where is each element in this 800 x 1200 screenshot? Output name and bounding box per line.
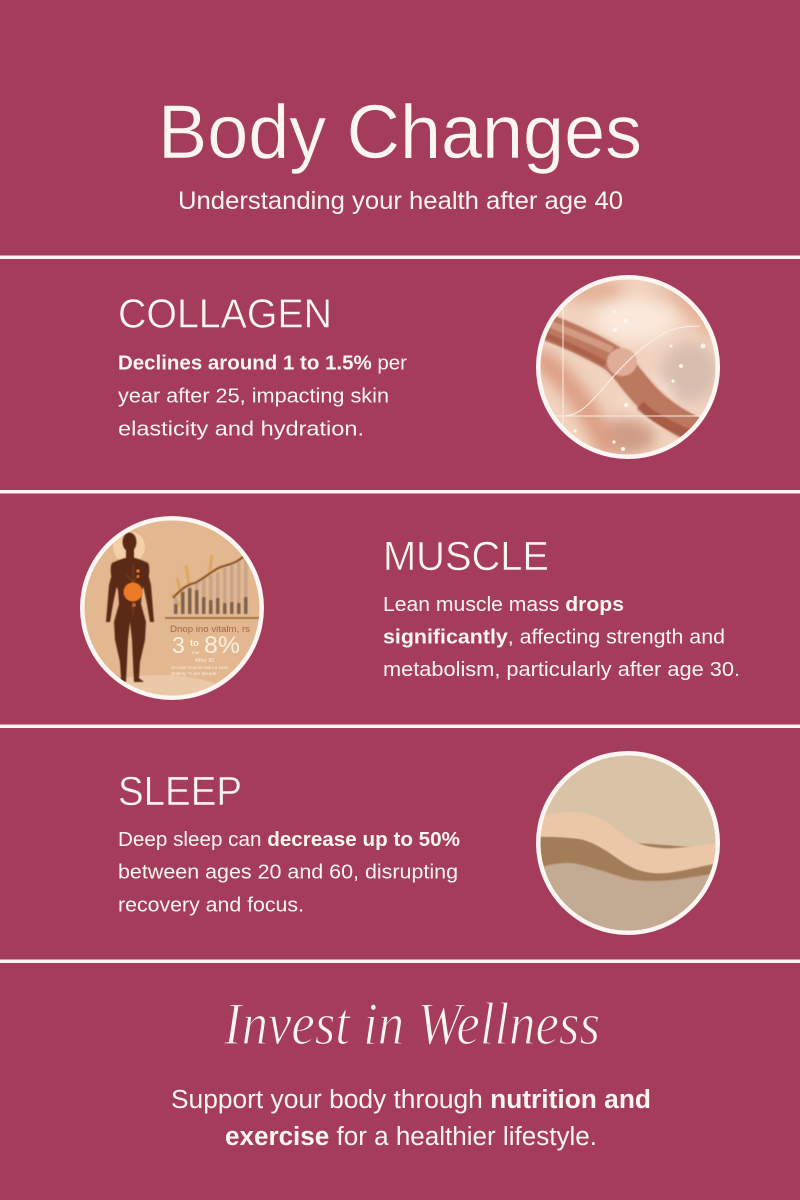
bar chart xyxy=(165,555,262,618)
text block: sleep xyxy=(118,828,460,916)
closing text: Support your body through nutrition and xyxy=(171,1086,651,1114)
panel: call to action xyxy=(171,991,651,1151)
text block: collagen: Declines around 1 to 1.5% per xyxy=(118,352,407,374)
chart note: After 30 xyxy=(195,658,214,664)
panel: sleep xyxy=(118,745,730,945)
chart note: vitatiety 7o per decade xyxy=(171,671,217,676)
chart label: Dnop ino vitalm, rs xyxy=(170,624,251,634)
collagen fibre xyxy=(532,320,695,437)
closing text: exercise for a healthier lifestyle. xyxy=(225,1123,597,1151)
image: collagen fibres xyxy=(536,275,720,459)
heading: sleep: SLEEP xyxy=(118,768,242,814)
chart value: to xyxy=(190,638,199,649)
chart note: At Lean muscle mar La esse xyxy=(171,665,229,670)
chart note xyxy=(171,658,229,676)
text block: muscle: significantly , affecting strength and xyxy=(383,626,725,648)
script heading: Invest in Wellness xyxy=(223,991,600,1057)
panel: muscle xyxy=(80,516,738,700)
text block: collagen: elasticity and hydration. xyxy=(118,418,364,440)
text block: muscle xyxy=(383,593,740,681)
closing text xyxy=(171,1086,651,1151)
image: body silhouette with vitality chart xyxy=(80,516,264,700)
text block: collagen: year after 25, impacting skin xyxy=(118,384,389,408)
panel: collagen xyxy=(118,270,726,466)
text block: sleep: between ages 20 and 60, disrupting xyxy=(118,860,458,884)
chart value: 3 xyxy=(172,632,185,658)
text block: muscle: Lean muscle mass drops xyxy=(383,593,624,616)
title: Body Changes xyxy=(158,90,642,175)
icon: body silhouette xyxy=(106,532,154,682)
chart value: 8% xyxy=(204,632,240,659)
chart value: mer xyxy=(192,650,200,655)
text block: sleep: Deep sleep can decrease up to 50% xyxy=(118,828,460,851)
subtitle: Understanding your health after age 40 xyxy=(178,187,623,215)
text block: muscle: metabolism, particularly after age 30. xyxy=(383,658,740,681)
chart value xyxy=(172,636,240,654)
heading: muscle: MUSCLE xyxy=(383,533,549,579)
text block: sleep: recovery and focus. xyxy=(118,894,304,916)
heading: collagen: COLLAGEN xyxy=(118,290,332,336)
image: sleep wave xyxy=(536,751,720,935)
text block: collagen xyxy=(118,352,407,440)
